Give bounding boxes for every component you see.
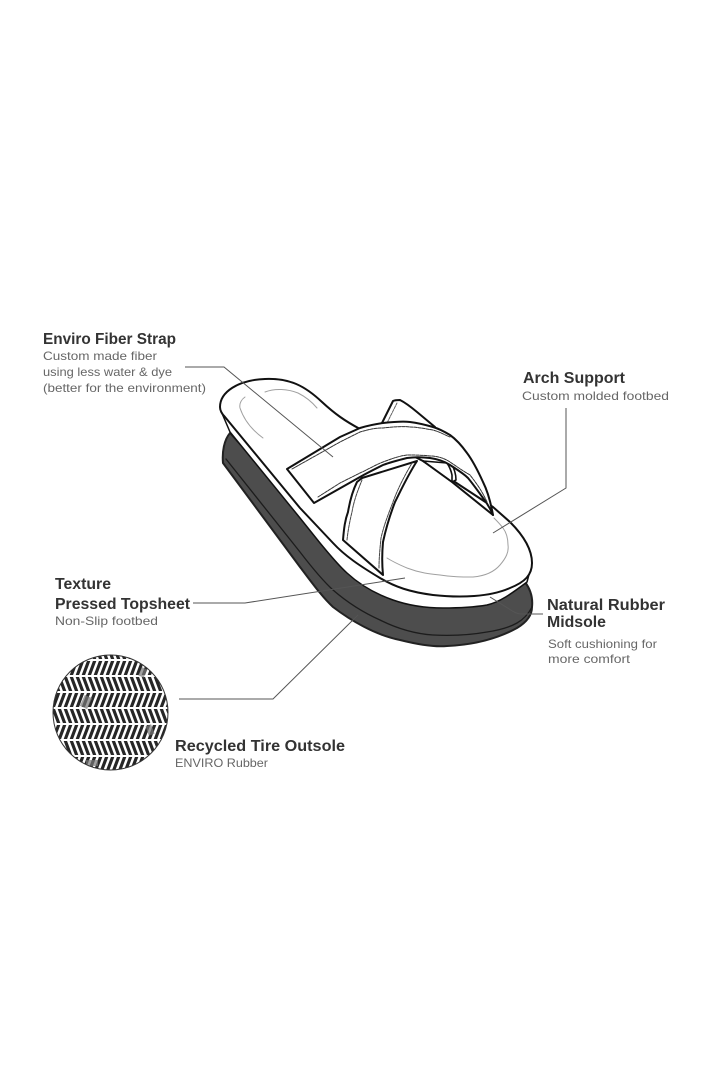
label: outsole: ENVIRO Rubber: [175, 756, 268, 770]
label: midsole: Natural Rubber: [547, 597, 665, 614]
main top strap: [287, 422, 493, 515]
label: strap: [43, 331, 206, 395]
leader: topsheet: [193, 578, 405, 603]
label: outsole: [175, 738, 345, 770]
label: strap: Custom made fiber: [43, 349, 157, 363]
leader: strap: [185, 367, 333, 457]
label: midsole: more comfort: [548, 652, 631, 666]
sandal illustration: [220, 379, 532, 646]
label: midsole: Soft cushioning for: [548, 637, 657, 651]
label: strap: using less water & dye: [43, 365, 172, 379]
footbed: [220, 379, 532, 597]
back strap piece: [382, 400, 435, 440]
midsole: [221, 411, 532, 608]
label: strap: Enviro Fiber Strap: [43, 331, 176, 348]
label: arch: [522, 370, 669, 403]
label: topsheet: [55, 576, 190, 628]
outsole: [223, 433, 532, 646]
leader: outsole: [179, 615, 358, 699]
lower crossing strap: [343, 461, 417, 575]
leader: arch: [493, 408, 566, 533]
label: topsheet: Pressed Topsheet: [55, 596, 190, 613]
texture swatch: [52, 654, 168, 770]
label: topsheet: Non-Slip footbed: [55, 614, 158, 628]
label: arch: Arch Support: [523, 370, 625, 387]
label: outsole: Recycled Tire Outsole: [175, 738, 345, 755]
label: topsheet: Texture: [55, 576, 111, 593]
right strap tab: [423, 461, 456, 482]
label: arch: Custom molded footbed: [522, 389, 669, 403]
label: midsole: [547, 597, 665, 666]
label: strap: (better for the environment): [43, 381, 206, 395]
leader: midsole: [490, 597, 543, 614]
label: midsole: Midsole: [547, 614, 606, 631]
footbed contour lines: [240, 389, 508, 577]
